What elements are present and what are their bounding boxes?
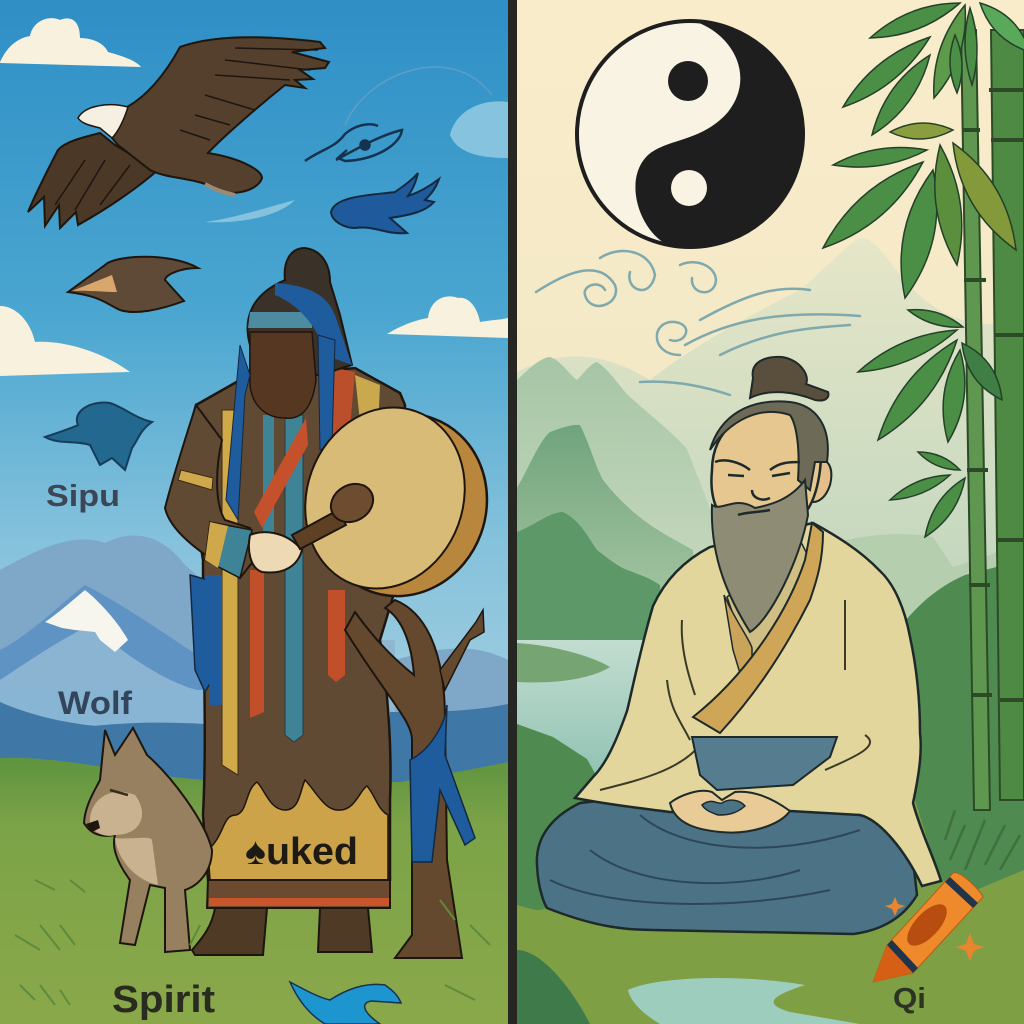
panel: taoism bbox=[517, 0, 1024, 1024]
icon: blue feather spirit bbox=[331, 173, 439, 233]
arc in sky bbox=[345, 67, 492, 125]
hands bbox=[670, 791, 790, 833]
bamboo leaves bbox=[823, 3, 1024, 537]
leg folds bbox=[550, 815, 860, 904]
thin bamboo stalk bbox=[961, 30, 990, 810]
left collar bbox=[724, 595, 752, 680]
green hill bbox=[517, 512, 663, 640]
armband bbox=[178, 470, 213, 490]
clouds bbox=[0, 18, 508, 376]
divider bbox=[508, 0, 517, 1024]
arm bbox=[165, 405, 258, 578]
collar bbox=[693, 523, 823, 733]
stalk nodes bbox=[989, 90, 1024, 700]
sash bbox=[692, 737, 837, 790]
panel: shamanism bbox=[0, 0, 512, 1024]
cuff bbox=[205, 522, 252, 578]
robe scalloped hem bbox=[208, 780, 388, 880]
label: Spirit: Spirit bbox=[112, 979, 215, 1021]
mid mountains bbox=[517, 357, 730, 640]
thin stalk nodes bbox=[962, 130, 992, 695]
right hills bbox=[800, 534, 1024, 700]
icon: brown spirit bird bbox=[68, 257, 198, 312]
hanging ribbons bbox=[190, 368, 380, 775]
bamboo bbox=[823, 3, 1024, 810]
meadow bbox=[0, 758, 508, 1024]
stream bbox=[628, 978, 860, 1024]
label: Buked on robe: ♠uked bbox=[245, 831, 358, 873]
staff bbox=[345, 600, 484, 958]
icon: frame drum bbox=[280, 385, 512, 620]
far range left bbox=[205, 640, 395, 780]
blue ribbon right bbox=[318, 335, 335, 450]
red sash bbox=[254, 418, 308, 528]
hair bbox=[710, 401, 828, 490]
label: Wolf: Wolf bbox=[58, 685, 132, 721]
head bbox=[711, 408, 821, 535]
topknot bbox=[750, 357, 828, 401]
hat bbox=[248, 248, 352, 375]
distant mountains bbox=[0, 536, 508, 740]
far range right bbox=[390, 704, 508, 785]
qi swirls bbox=[536, 251, 860, 395]
sparkles bbox=[885, 897, 984, 961]
near mountains bbox=[517, 425, 700, 640]
ear bbox=[808, 460, 831, 502]
icon: blue spirit creature bbox=[45, 403, 152, 470]
icon: yin yang bbox=[577, 21, 803, 247]
foreground ground bbox=[517, 870, 1024, 1024]
hem band bbox=[207, 880, 390, 908]
icon: crayon logo bbox=[873, 873, 984, 982]
robe bbox=[185, 368, 405, 880]
river bbox=[517, 640, 717, 780]
label: Sipu: Sipu bbox=[46, 478, 120, 513]
icon: blue bird at bottom bbox=[290, 982, 401, 1024]
face features bbox=[715, 460, 800, 515]
hat band bbox=[248, 312, 312, 328]
legs bbox=[537, 780, 917, 934]
veil beard bbox=[250, 332, 316, 418]
shaman figure bbox=[165, 248, 405, 955]
robe bbox=[575, 523, 941, 886]
left bush bbox=[517, 724, 640, 910]
right forest bbox=[880, 560, 1024, 900]
islet bbox=[517, 643, 610, 682]
wolf bbox=[84, 728, 212, 952]
main bamboo stalk bbox=[991, 30, 1024, 800]
eagle bbox=[28, 37, 329, 228]
grass tufts bbox=[15, 880, 490, 1005]
inner collar bbox=[727, 540, 815, 663]
grass tufts near bamboo bbox=[945, 810, 1020, 870]
icon: eye spirit bbox=[305, 124, 402, 161]
blue ribbon left bbox=[226, 345, 250, 520]
beard bbox=[712, 480, 808, 632]
meadow bbox=[517, 800, 1024, 1024]
foreground bush bbox=[517, 950, 590, 1024]
hand bbox=[249, 532, 302, 573]
drum beater bbox=[292, 476, 380, 549]
far mountains bbox=[517, 238, 1024, 660]
blue headband bbox=[275, 283, 352, 365]
boots bbox=[192, 908, 372, 955]
gap between hands bbox=[702, 800, 745, 815]
robe folds bbox=[600, 600, 870, 790]
label: Qi: Qi bbox=[893, 983, 926, 1015]
snowy mountain bbox=[0, 585, 205, 785]
sage figure bbox=[537, 357, 941, 934]
